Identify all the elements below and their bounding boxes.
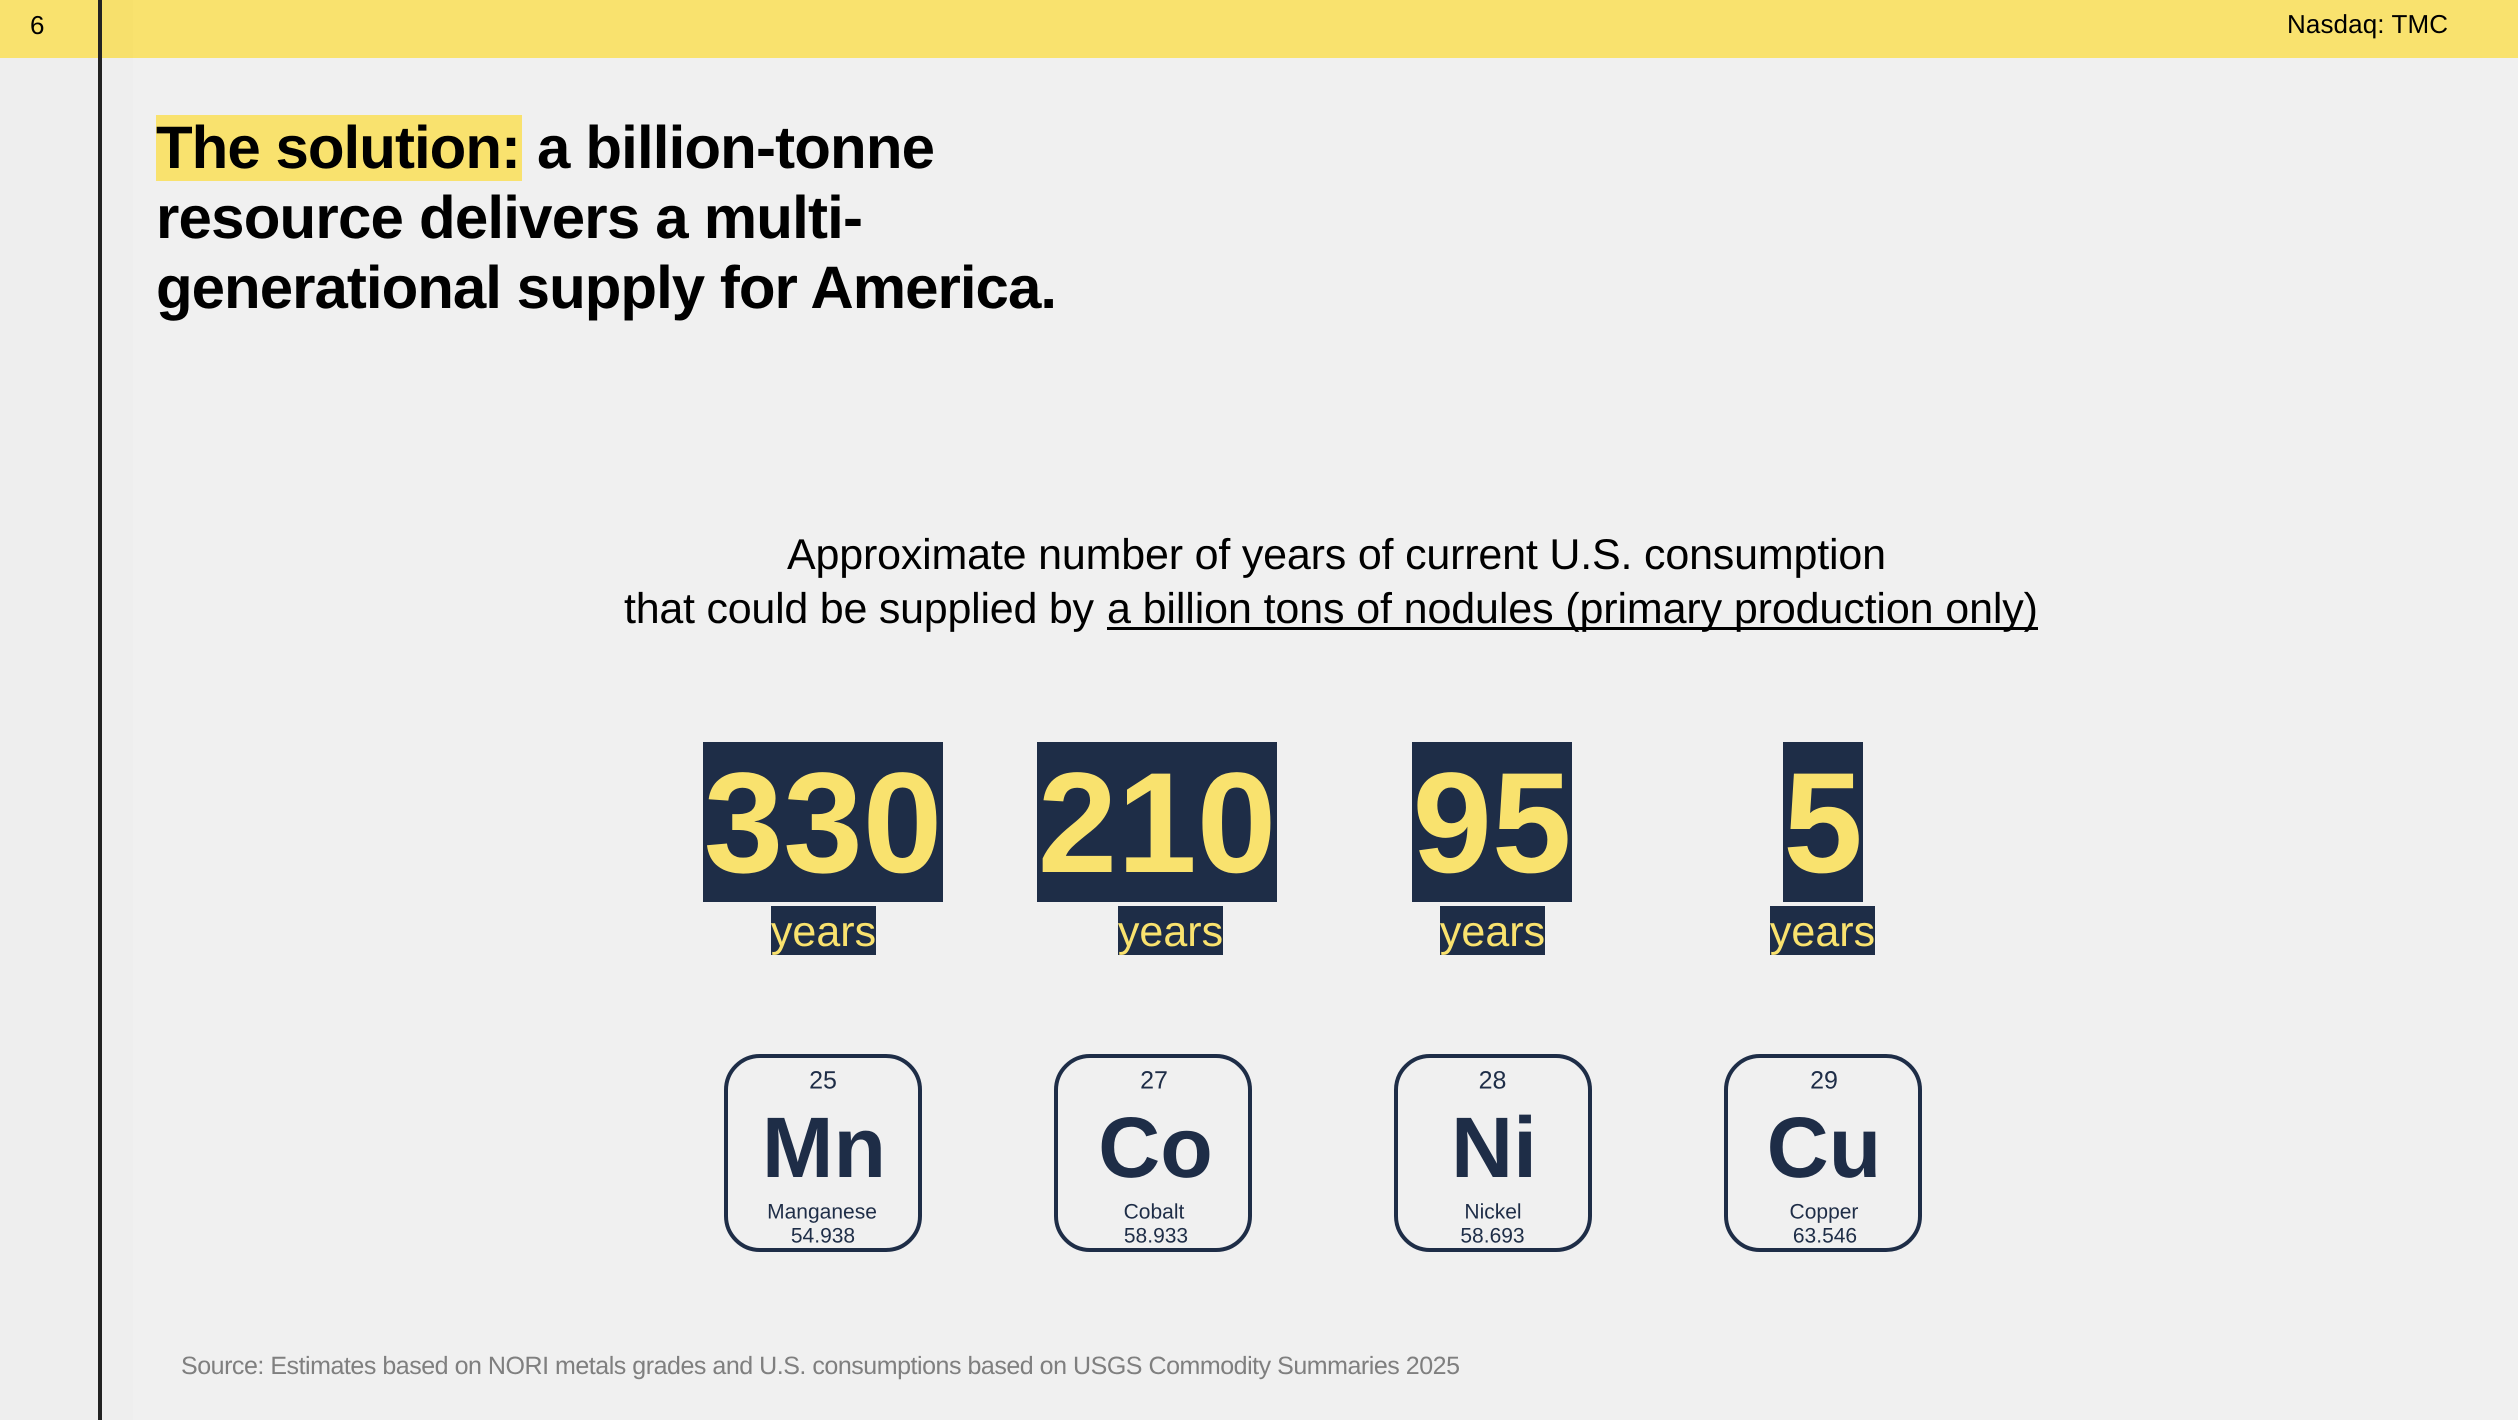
subtitle: a billion tons of nodules (primary production only) [1107, 585, 2038, 633]
element card: copper: Copper [1790, 1200, 1858, 1224]
element card: copper: 63.546 [1793, 1224, 1857, 1248]
element card: cobalt [1056, 1056, 1250, 1250]
stat: cobalt 210 years: years [1118, 908, 1223, 956]
title: The solution: [156, 114, 521, 181]
title: resource delivers a multi- [156, 184, 863, 251]
element card: cobalt: Co [1098, 1100, 1213, 1196]
element card: cobalt: 58.933 [1124, 1224, 1188, 1248]
stat: copper 5 years [1770, 742, 1875, 956]
title: generational supply for America. [156, 254, 1057, 321]
stat: nickel 95 years: years [1440, 908, 1545, 956]
ticker label: Nasdaq: TMC [2287, 9, 2448, 39]
element card: cobalt: 27 [1140, 1066, 1168, 1094]
element card: manganese: 54.938 [791, 1224, 855, 1248]
stat: manganese 330 years: years [771, 908, 876, 956]
stat: copper 5 years: years [1770, 908, 1875, 956]
element card: manganese: 25 [809, 1066, 837, 1094]
element card: nickel: Ni [1451, 1100, 1537, 1196]
element card: copper [1726, 1056, 1920, 1250]
element card: manganese: Mn [762, 1100, 886, 1196]
element card: nickel: Nickel [1464, 1200, 1522, 1224]
vertical rule [98, 0, 102, 1420]
page number: 6 [30, 10, 44, 40]
element card: nickel [1396, 1056, 1590, 1250]
subtitle: Approximate number of years of current U.S. consumption [787, 531, 1886, 579]
stat: copper 5 years: 5 [1783, 744, 1863, 903]
subtitle [624, 531, 2038, 633]
element card: copper: Cu [1767, 1100, 1881, 1196]
element card: cobalt: Cobalt [1124, 1200, 1185, 1224]
element card: copper: 29 [1810, 1066, 1838, 1094]
element card: manganese [726, 1056, 920, 1250]
stat: cobalt 210 years: 210 [1038, 744, 1276, 903]
top header bar [0, 0, 2518, 58]
stat: manganese 330 years: 330 [704, 744, 942, 903]
element card: nickel: 58.693 [1460, 1224, 1525, 1248]
element card: manganese: Manganese [767, 1200, 877, 1224]
stat: nickel 95 years: 95 [1412, 744, 1572, 903]
source note: Source: Estimates based on NORI metals grades and U.S. consumptions based on USGS Commodity Summaries 2025 [181, 1352, 1460, 1380]
subtitle: that could be supplied by [624, 585, 1094, 633]
title: a billion-tonne [537, 114, 935, 181]
element card: nickel: 28 [1479, 1066, 1506, 1094]
title [156, 114, 1057, 321]
